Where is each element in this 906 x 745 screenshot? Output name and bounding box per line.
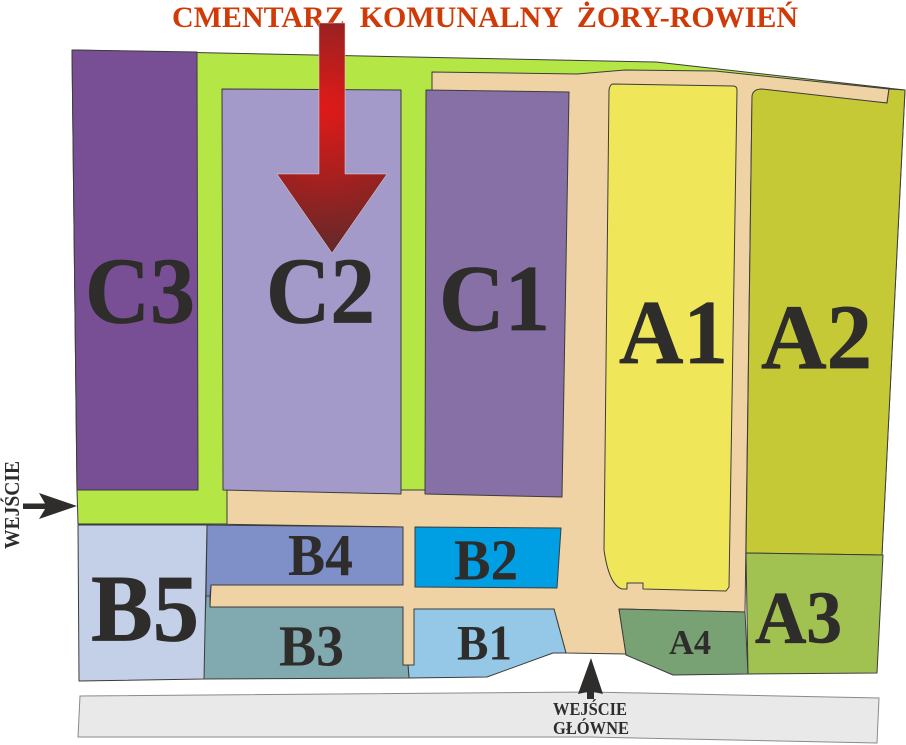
plot B5: B5 [91, 556, 199, 662]
label: side entrance: WEJŚCIE [0, 461, 24, 549]
plot A2 [746, 89, 905, 555]
plot B4 [206, 522, 403, 596]
plot A3: A3 [755, 578, 842, 660]
plot A4: A4 [669, 623, 711, 662]
plot B3 [203, 596, 409, 679]
plot A3 [746, 553, 883, 674]
plot A1 [604, 84, 737, 591]
panel: green area [72, 50, 905, 554]
plot B5 [78, 525, 207, 681]
arrow: main entrance [578, 658, 603, 699]
panel: road [207, 70, 889, 665]
plot B2 [415, 527, 561, 592]
plot B1: B1 [457, 614, 512, 670]
plot C3 [72, 50, 198, 490]
plot A1: A1 [619, 282, 728, 383]
label: main entrance: GŁÓWNE [553, 717, 629, 738]
plot B3: B3 [279, 614, 344, 678]
plot B2: B2 [454, 528, 518, 592]
plot B1 [408, 609, 566, 678]
plot A2: A2 [761, 286, 872, 388]
plot A4 [619, 609, 748, 675]
plot C1: C1 [439, 247, 550, 351]
arrow: side entrance [23, 493, 77, 519]
plot C1 [425, 90, 569, 497]
label: main entrance: WEJŚCIE [553, 698, 627, 719]
plot B4: B4 [288, 522, 353, 588]
road strip [78, 692, 879, 743]
plot C3: C3 [85, 240, 195, 344]
plot C2: C2 [266, 240, 375, 344]
title: CMENTARZ KOMUNALNY ŻORY-ROWIEŃ [172, 1, 798, 34]
arrow: cemetery location [277, 23, 387, 253]
plot C2 [222, 89, 401, 494]
